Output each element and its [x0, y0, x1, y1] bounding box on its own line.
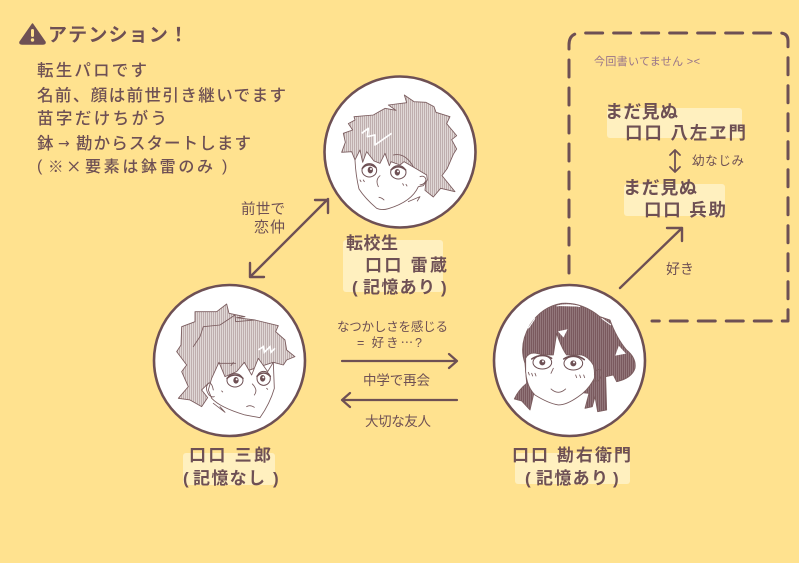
intro text block: 勘からスタートします — [76, 134, 251, 153]
label: past life lovers: 恋仲 — [254, 219, 285, 236]
label: childhood friends: 幼なじみ — [692, 154, 744, 168]
label: kanemon: 記憶あり — [536, 469, 608, 488]
name highlight: saburo — [183, 453, 275, 485]
intro text block — [37, 61, 286, 177]
label: likes: 好き — [666, 261, 694, 277]
label: raizo: 口口 雷蔵 — [365, 256, 447, 275]
label: saburo: 記憶なし — [193, 469, 265, 488]
portrait: saburo — [154, 285, 305, 436]
label: hyosuke: 口口 兵助 — [644, 200, 726, 220]
label: raizo: ( — [352, 278, 358, 297]
label: hyosuke: まだ見ぬ — [623, 178, 697, 198]
intro text block: → — [58, 136, 70, 152]
arrow: to kanemon — [342, 354, 457, 368]
name highlight: raizo — [343, 240, 443, 292]
label: feels nostalgia: なつかしさを感じる — [337, 319, 448, 334]
label: saburo: ( — [183, 469, 189, 488]
intro text block: 転生パロです — [37, 61, 147, 80]
intro text block: 要素は鉢雷のみ — [85, 158, 213, 176]
label: reunion in middle school: 中学で再会 — [363, 373, 430, 388]
label: raizo — [346, 234, 447, 297]
title: アテンション！ — [48, 25, 188, 46]
label: saburo — [183, 446, 279, 488]
label: past life lovers — [241, 201, 285, 236]
label: hachizaemon — [605, 102, 746, 143]
name highlight: kanemon — [515, 453, 630, 484]
label: raizo: ) — [441, 278, 447, 297]
intro text block: ※ — [48, 155, 64, 177]
portrait: kanemon — [494, 285, 645, 436]
icon: warning triangle — [20, 24, 45, 44]
panel: not drawn characters dashed box — [569, 33, 788, 321]
arrow: likes — [620, 228, 682, 288]
label: hachizaemon: 口口 八左ヱ門 — [625, 123, 746, 143]
label: raizo: 転校生 — [346, 234, 398, 253]
label: feels nostalgia — [337, 319, 448, 351]
label: kanemon — [512, 445, 631, 488]
label: feels nostalgia: = 好き…? — [357, 332, 422, 351]
intro text block: ) — [222, 158, 227, 175]
label: hachizaemon: まだ見ぬ — [605, 102, 678, 122]
label: hyosuke — [623, 178, 726, 220]
arrow: to saburo — [342, 393, 457, 407]
label: dear friend: 大切な友人 — [365, 414, 432, 429]
label: raizo: 記憶あり — [363, 278, 435, 297]
intro text block: × — [66, 155, 82, 177]
note: not drawn this time: 今回書いてません >< — [594, 54, 700, 68]
label: saburo: ) — [273, 469, 279, 488]
label: saburo: 口口 三郎 — [189, 446, 271, 465]
intro text block: ( — [37, 158, 43, 175]
name highlight: hachizaemon — [607, 108, 742, 138]
intro text block: 苗字だけちがう — [37, 108, 167, 128]
name highlight: hyosuke — [624, 184, 725, 216]
label: kanemon: ) — [613, 469, 619, 488]
attention heading — [20, 24, 188, 46]
label: past life lovers: 前世で — [241, 201, 285, 218]
arrow: past life lovers — [250, 199, 328, 277]
intro text block: 名前、顔は前世引き継いでます — [37, 86, 286, 105]
label: kanemon: ( — [525, 469, 531, 488]
portrait: transfer student — [324, 76, 476, 228]
label: kanemon: 口口 勘右衛門 — [512, 445, 631, 465]
intro text block: 鉢 — [37, 134, 54, 153]
arrow: childhood friends — [670, 150, 680, 172]
